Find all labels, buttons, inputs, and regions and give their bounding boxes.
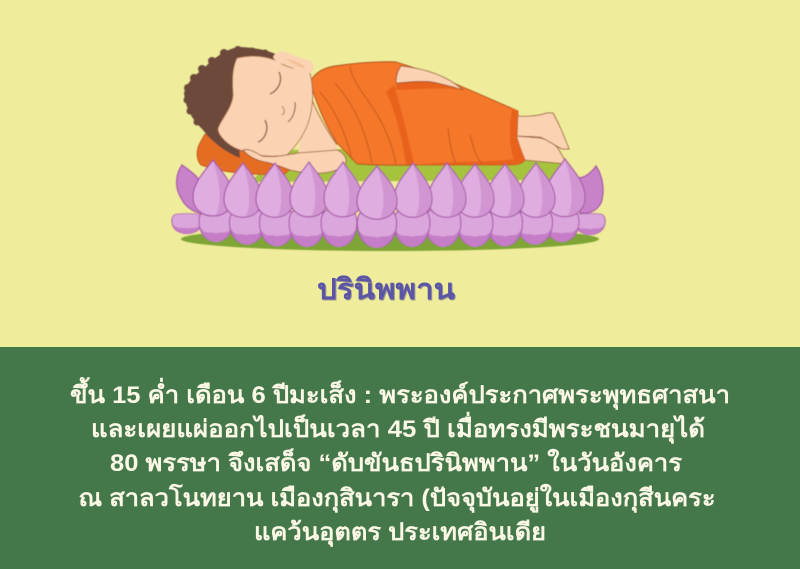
ground shadow	[181, 227, 599, 251]
robe	[310, 62, 525, 165]
panel: green description	[0, 347, 800, 569]
hair	[184, 46, 280, 158]
nose	[282, 106, 284, 115]
arm under head	[243, 150, 346, 173]
title: ปรินิพพาน	[317, 274, 455, 306]
text block: description: 80 พรรษา จึงเสด็จ “ดับขันธปรินิพพาน” ในวันอังคาร	[110, 448, 682, 477]
pillow	[197, 134, 300, 175]
illustration: reclining Buddha on lotus	[172, 46, 605, 251]
mouth	[288, 102, 295, 122]
feet	[516, 113, 569, 164]
eye upper	[270, 72, 281, 94]
neck	[298, 100, 337, 154]
text block: description: ขึ้น 15 ค่ำ เดือน 6 ปีมะเส็ง : พระองค์ประกาศพระพุทธศาสนา	[70, 376, 730, 411]
ear	[273, 51, 314, 74]
ear shading	[285, 58, 306, 68]
text block: description	[70, 376, 730, 548]
upper lotus row	[177, 159, 603, 219]
text block: description: ณ สาลวโนทยาน เมืองกุสินารา (ปัจจุบันอยู่ในเมืองกุสีนคระ	[78, 483, 716, 514]
face	[218, 56, 313, 156]
text block: description: แคว้นอุตตร ประเทศอินเดีย	[254, 519, 546, 548]
lower lotus row	[172, 209, 605, 248]
robe edge at neck	[312, 100, 337, 145]
background	[0, 0, 800, 347]
green mattress	[250, 146, 570, 182]
eye lower	[258, 120, 267, 142]
title: ปรินิพพาน	[318, 275, 456, 307]
text block: description: และเผยแผ่ออกไปเป็นเวลา 45 ปี เมื่อทรงมีพระชนมายุได้	[91, 411, 705, 445]
upper arm	[396, 66, 463, 90]
